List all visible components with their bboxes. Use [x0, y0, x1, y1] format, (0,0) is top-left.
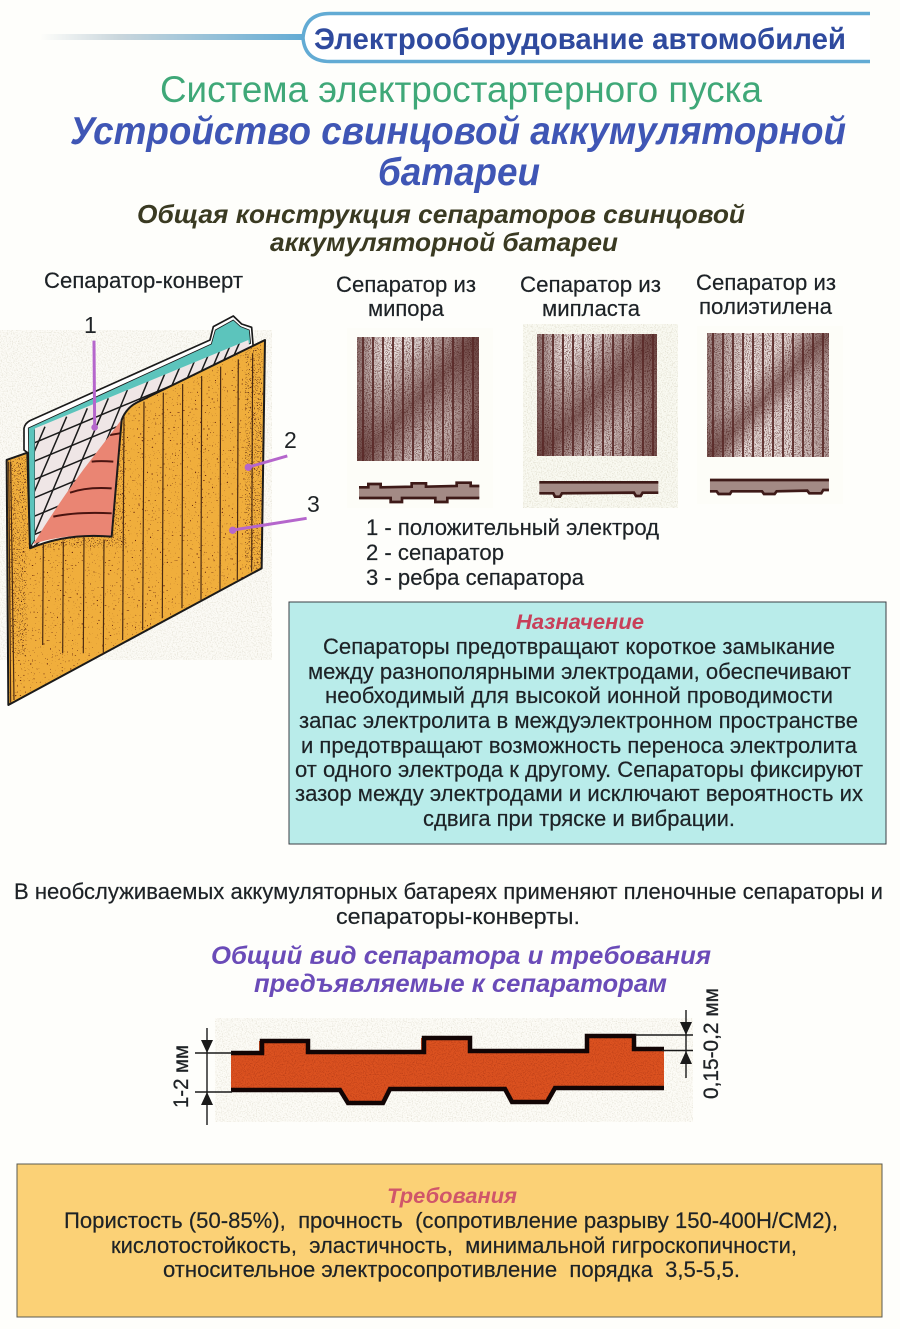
- header banner: Электрооборудование автомобилей: [314, 23, 846, 56]
- column labels: Сепаратор из: [520, 272, 661, 297]
- orange front sheet: [7, 340, 265, 705]
- column labels: мипласта: [542, 296, 641, 321]
- panel: purpose: Сепараторы предотвращают короткое замыкание: [323, 634, 835, 659]
- title: main heading: [70, 110, 846, 194]
- legend: [366, 515, 659, 590]
- legend: 1 - положительный электрод: [366, 515, 659, 540]
- sheet stipple: [0, 337, 267, 707]
- header banner: [40, 14, 870, 62]
- profile body: [231, 1036, 664, 1104]
- diagram: separator cross-section: [195, 1010, 693, 1125]
- panel: purpose: и предотвращают возможность переноса электролита: [301, 733, 858, 758]
- sample: mipor profile: [359, 483, 479, 502]
- dimension arrowheads: [201, 1022, 692, 1105]
- column labels: полиэтилена: [699, 294, 833, 319]
- panel: purpose: от одного электрода к другому. Сепараторы фиксируют: [295, 757, 863, 782]
- panel: requirements: Пористость (50-85%), прочность (сопротивление разрыву 150-400Н/СМ2),: [64, 1208, 838, 1233]
- sample: miplast separator: [537, 334, 657, 456]
- separator ribs: [9, 353, 253, 703]
- peeled salmon sheet: [33, 419, 122, 544]
- profile outline: [231, 1036, 664, 1103]
- sample: polyethylene separator: [707, 333, 829, 457]
- callout numbers: [84, 312, 320, 517]
- callout numbers: 3: [307, 491, 320, 517]
- subheading: separators design: аккумуляторной батареи: [270, 227, 618, 257]
- dimension label: 0.15-0.2 mm: 0,15-0,2 мм: [700, 988, 723, 1099]
- panel: purpose: сдвига при тряске и вибрации.: [423, 806, 735, 831]
- callout numbers: 2: [284, 427, 297, 453]
- legend: 3 - ребра сепаратора: [366, 565, 585, 590]
- sample: miplast profile: [539, 482, 658, 497]
- panel: purpose: запас электролита в междуэлектронном пространстве: [299, 708, 858, 733]
- teal band: [28, 320, 251, 547]
- panel backdrop for samples: [347, 324, 843, 508]
- diagram: envelope separator: [0, 316, 307, 707]
- column labels: мипора: [368, 296, 445, 321]
- subheading: general view: [211, 942, 711, 998]
- callout numbers: 1: [84, 312, 97, 338]
- pointers: [94, 341, 307, 530]
- column labels: Сепаратор из: [696, 270, 836, 295]
- plate frame with tab: [24, 316, 253, 548]
- dimension lines: [195, 1010, 693, 1125]
- title: main heading: батареи: [378, 151, 540, 194]
- dimension label: 1-2 mm: 1-2 мм: [170, 1045, 193, 1108]
- panel: requirements: относительное электросопротивление порядка 3,5-5,5.: [163, 1257, 740, 1282]
- label: envelope separator: Сепаратор-конверт: [44, 268, 243, 293]
- legend: 2 - сепаратор: [366, 540, 504, 565]
- sample: mipor separator: [357, 337, 479, 461]
- panel: purpose: между разнополярными электродами, обеспечивают: [308, 659, 851, 684]
- column labels: Сепаратор из: [336, 272, 476, 297]
- subheading: general view: Общий вид сепаратора и требования: [211, 942, 711, 970]
- subheading: general view: предъявляемые к сепараторам: [254, 970, 667, 998]
- sample: polyethylene profile: [710, 480, 829, 494]
- text block: maintenance-free batteries: [14, 879, 883, 929]
- panel: requirements: кислотостойкость, эластичность, минимальной гигроскопичности,: [111, 1233, 797, 1258]
- title: main heading: Устройство свинцовой аккумуляторной: [70, 110, 846, 153]
- panel: purpose: Назначение: [516, 611, 644, 634]
- title: system: Система электростартерного пуска: [160, 69, 762, 110]
- panel: purpose: [289, 602, 886, 844]
- panel: requirements: Требования: [387, 1185, 517, 1208]
- subheading: separators design: [137, 199, 745, 257]
- panel: purpose: необходимый для высокой ионной проводимости: [325, 683, 833, 708]
- white electrode grid: [35, 340, 250, 545]
- panel: requirements: [17, 1164, 882, 1317]
- panel: purpose: зазор между электродами и исключают вероятность их: [295, 781, 863, 806]
- subheading: separators design: Общая конструкция сепараторов свинцовой: [137, 199, 745, 229]
- text block: maintenance-free batteries: сепараторы-конверты.: [336, 904, 580, 929]
- text block: maintenance-free batteries: В необслуживаемых аккумуляторных батареях применяют пленочные сепараторы и: [14, 879, 883, 904]
- column labels: [336, 270, 836, 321]
